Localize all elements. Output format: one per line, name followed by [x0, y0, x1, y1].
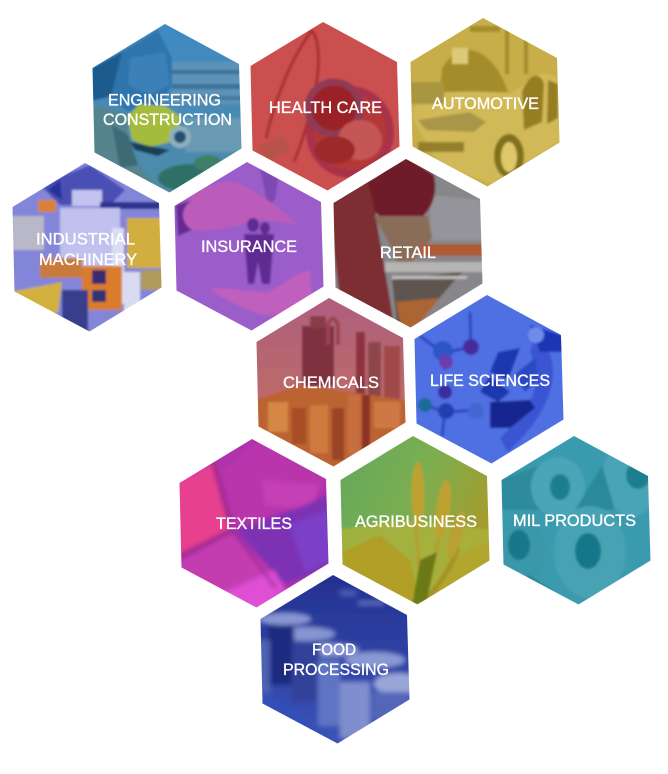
photo: spools of thread, magenta tint: [180, 439, 328, 608]
photo: wheat field, green-gold tint: [340, 436, 490, 604]
photo: chemical plant, rose-orange tint: [256, 298, 406, 466]
label: engineering construction: [103, 90, 232, 129]
hexagon: textiles: [180, 439, 328, 608]
photo: worker with yellow helmet, blue tint: [92, 24, 242, 192]
photo: factory machinery, purple tint: [12, 163, 162, 332]
label: health care: HEALTH CARE: [269, 98, 382, 117]
label: life sciences: LIFE SCIENCES: [430, 371, 550, 390]
label: industrial machinery: MACHINERY: [39, 250, 137, 269]
hexagon: insurance: [174, 162, 324, 330]
label: automotive: AUTOMOTIVE: [432, 94, 539, 113]
label: insurance: INSURANCE: [201, 237, 297, 256]
label: engineering construction: ENGINEERING: [108, 90, 221, 110]
photo: molecules and microscope, blue tint: [414, 295, 564, 464]
hexagon: chemicals: [256, 298, 406, 466]
label: chemicals: CHEMICALS: [283, 373, 379, 392]
hexagon: automotive: [410, 18, 560, 186]
photo: food jars on conveyor, blue tint: [260, 575, 410, 744]
label: food processing: FOOD: [312, 640, 356, 659]
label: textiles: TEXTILES: [216, 514, 292, 533]
label: retail: RETAIL: [380, 243, 436, 262]
label: food processing: PROCESSING: [283, 660, 389, 679]
photo: protective hands over family, purple tint: [174, 162, 324, 330]
hexagon: retail: [334, 159, 482, 328]
hexagon: mil products: [502, 436, 650, 604]
hexagon: life sciences: [414, 295, 564, 464]
hexagon: food processing: [260, 575, 410, 744]
label: engineering construction: CONSTRUCTION: [103, 110, 232, 129]
hexagon: agribusiness: [340, 436, 490, 604]
label: industrial machinery: INDUSTRIAL: [36, 230, 135, 248]
photo: stethoscope, red tint: [250, 22, 400, 190]
photo: steel coils, teal tint: [502, 436, 650, 604]
hexagon: health care: [250, 22, 400, 190]
label: agribusiness: AGRIBUSINESS: [355, 512, 477, 531]
hexagon: industrial machinery: [12, 163, 162, 332]
photo: hand on shopping cart, maroon tint: [334, 159, 482, 328]
label: industrial machinery: [36, 230, 137, 269]
label: mil products: MIL PRODUCTS: [513, 511, 636, 530]
photo: car on assembly line, yellow tint: [410, 18, 560, 186]
hexagon: engineering construction: [92, 24, 242, 192]
label: food processing: [283, 640, 389, 679]
